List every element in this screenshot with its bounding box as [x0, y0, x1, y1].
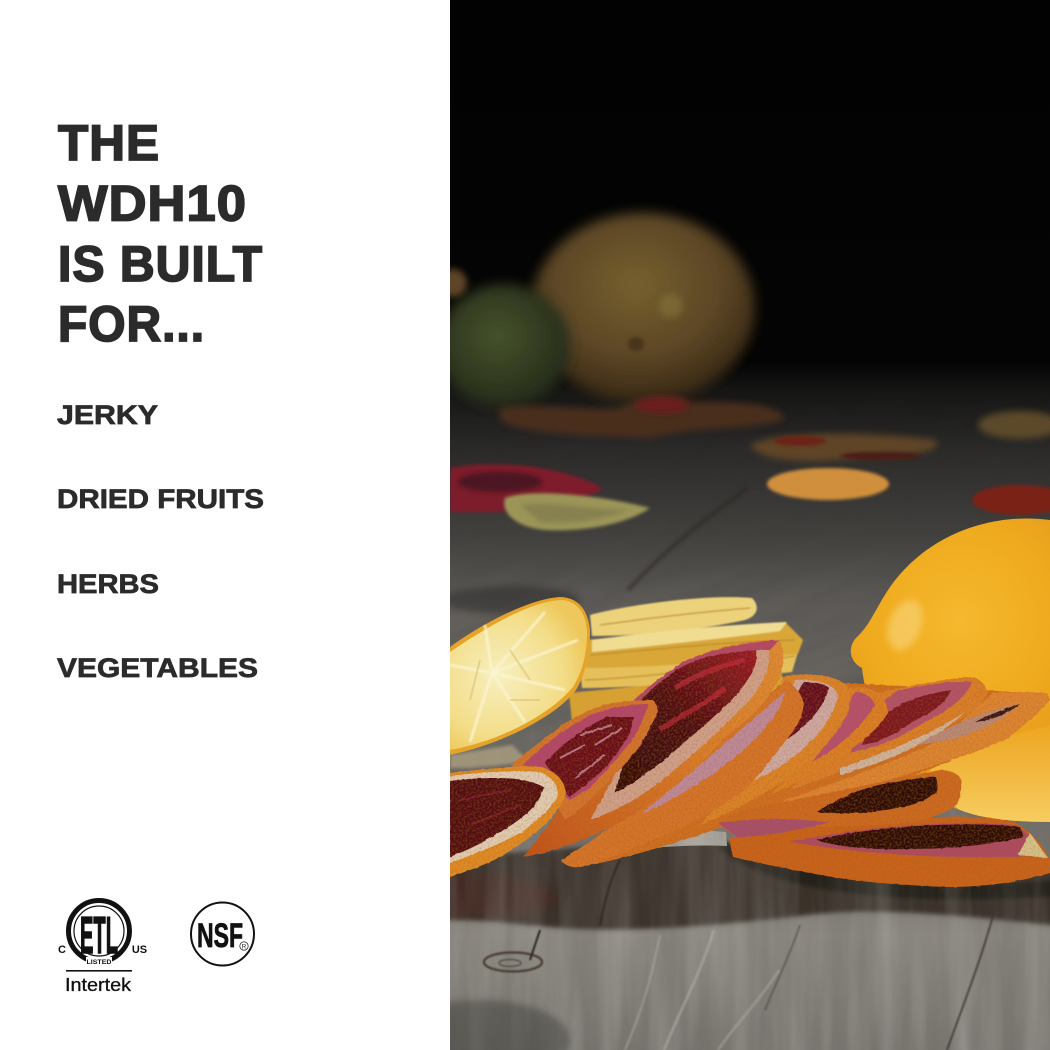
icon: ETL Intertek certification mark: C: [58, 944, 66, 956]
icon: ETL Intertek certification mark: Intertek: [65, 975, 132, 995]
title: WDH10: [58, 176, 247, 232]
stack of dried lemon slices: [569, 597, 803, 722]
slice: far right long: [756, 692, 1050, 810]
dried lemon slice: [450, 597, 590, 755]
icon: ETL Intertek certification mark: LISTED: [86, 959, 112, 966]
blurred grapefruit: [531, 213, 755, 403]
blurred lime: [438, 284, 570, 408]
icon: NSF certification mark: [190, 902, 255, 966]
slice: flat middle: [718, 770, 961, 837]
list of foods: [56, 400, 264, 683]
list item: herbs: HERBS: [57, 569, 159, 599]
slice: middle back right: [770, 687, 888, 795]
list item: vegetables: VEGETABLES: [57, 653, 258, 683]
title: [56, 115, 263, 350]
table and dark background: [450, 0, 1050, 1050]
icon: ETL Intertek certification mark: US: [132, 944, 147, 956]
whole lemon: [851, 518, 1050, 822]
slice: middle: [700, 674, 850, 825]
slice: long lower: [561, 680, 804, 867]
list item: dried fruits: DRIED FRUITS: [57, 484, 264, 514]
slice: large centre: [523, 640, 783, 857]
title: IS BUILT: [58, 236, 263, 292]
list item: jerky: JERKY: [57, 400, 158, 430]
slice: flat bottom: [729, 817, 1050, 887]
orange body joining the slices: [561, 680, 1048, 867]
slice: front left: [450, 766, 565, 877]
icon: ETL Intertek certification mark: [58, 898, 147, 995]
blurred background fruit: [438, 213, 755, 408]
wood knot and grain marks: [484, 860, 997, 1050]
slice: right upper: [790, 677, 986, 790]
slice: left middle: [511, 700, 657, 820]
panel: left text column: [0, 0, 450, 1050]
title: THE: [58, 115, 160, 171]
dried blood orange slices: [450, 640, 1050, 887]
panel: photo of dried citrus on a wooden table: [450, 0, 1050, 1050]
icon: NSF certification mark: R: [242, 944, 247, 950]
shadow beneath the slices: [440, 828, 1050, 930]
blurred background slices: [450, 396, 1050, 530]
